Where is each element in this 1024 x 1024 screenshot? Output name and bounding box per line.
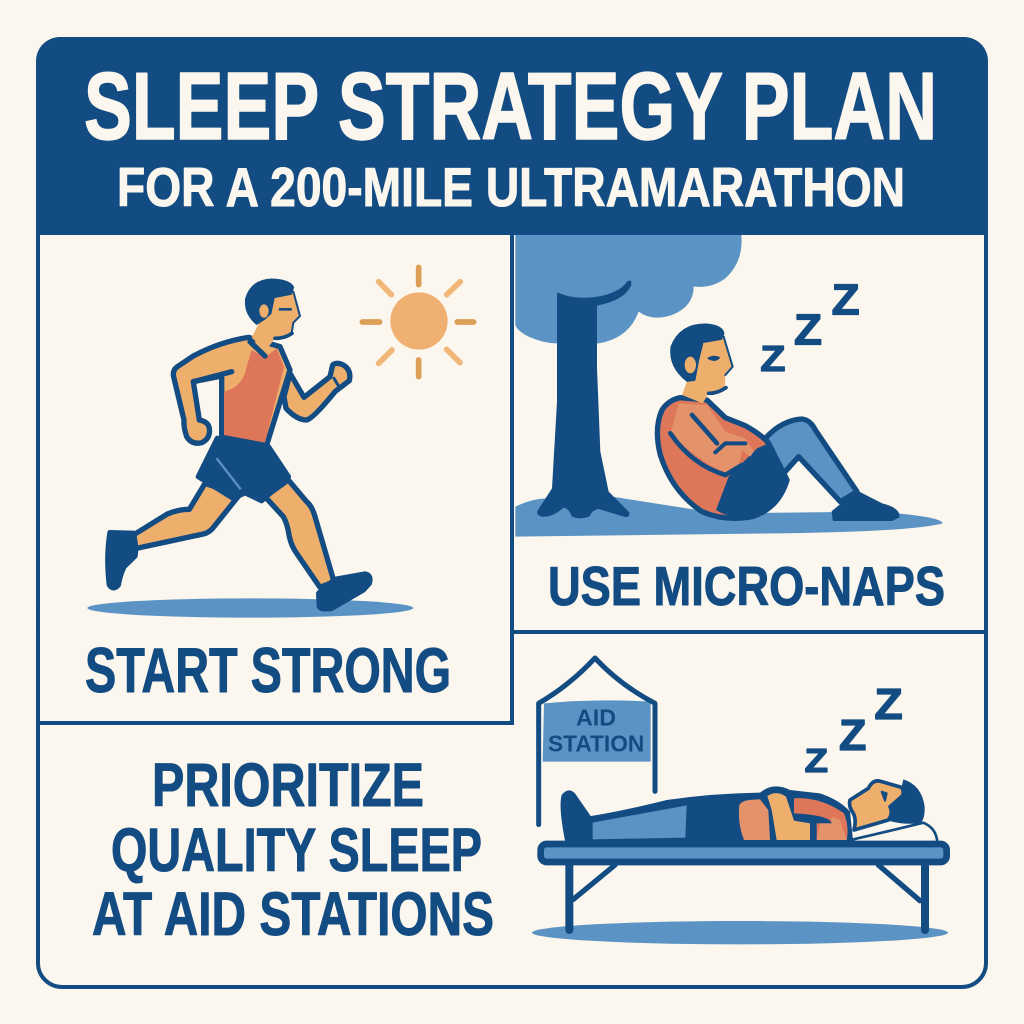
label: start strong: START STRONG bbox=[85, 636, 451, 706]
icon: sleeping zs: Z bbox=[805, 743, 828, 780]
panel: use micro-naps bbox=[515, 235, 945, 617]
panel: start strong bbox=[85, 267, 474, 706]
icon: sleeping zs bbox=[805, 681, 903, 780]
shorts bbox=[198, 438, 288, 501]
icon: sleeping zs: Z bbox=[760, 338, 785, 379]
leg bbox=[765, 419, 857, 502]
header banner bbox=[36, 37, 988, 235]
hair bbox=[671, 324, 724, 381]
neck and face bbox=[682, 337, 734, 403]
hair bbox=[888, 779, 925, 824]
body silhouette bbox=[561, 786, 853, 843]
icon: sleeping zs: Z bbox=[794, 306, 822, 354]
cot legs bbox=[569, 863, 925, 930]
torso bbox=[657, 398, 787, 518]
icon: sleeping zs: Z bbox=[874, 681, 903, 729]
icon: runner bbox=[87, 279, 413, 618]
front arm bbox=[284, 363, 350, 420]
neck and face bbox=[252, 292, 300, 352]
shirt: lower bbox=[739, 799, 770, 840]
label: prioritize quality sleep at aid stations: PRIORITIZE bbox=[152, 751, 424, 819]
arm bbox=[767, 793, 810, 840]
jeans bbox=[593, 805, 687, 839]
icon: aid station tent bbox=[539, 658, 655, 825]
back shoe bbox=[108, 533, 136, 588]
pillow bbox=[853, 823, 937, 843]
label: prioritize quality sleep at aid stations: QUALITY SLEEP bbox=[111, 816, 482, 884]
icon: sun bbox=[362, 267, 474, 377]
icon: aid station tent: STATION bbox=[548, 731, 644, 757]
singlet bbox=[224, 348, 284, 443]
shoe bbox=[833, 492, 899, 520]
tree crown bbox=[515, 235, 742, 343]
tree trunk bbox=[537, 281, 631, 518]
icon: sleeping zs: Z bbox=[832, 276, 860, 324]
back leg bbox=[133, 483, 239, 549]
shirt: upper bbox=[794, 798, 848, 840]
icon: sleeping zs bbox=[760, 276, 860, 379]
label: prioritize quality sleep at aid stations bbox=[92, 751, 494, 948]
label: prioritize quality sleep at aid stations: AT AID STATIONS bbox=[92, 880, 494, 948]
front shoe bbox=[319, 574, 370, 609]
icon: seated runner napping bbox=[657, 324, 899, 520]
cot top bbox=[541, 844, 947, 862]
ground shadow bbox=[87, 598, 413, 618]
panel dividers bbox=[38, 235, 986, 724]
folded arm bbox=[671, 403, 754, 472]
head bbox=[850, 781, 903, 830]
cot shadow bbox=[532, 921, 948, 944]
icon: aid station tent: AID bbox=[576, 704, 616, 730]
torso and rear arm bbox=[173, 337, 290, 445]
icon: sleeping zs: Z bbox=[839, 712, 866, 760]
ground bbox=[515, 497, 943, 537]
label: use micro-naps: USE MICRO-NAPS bbox=[548, 555, 945, 617]
hips bbox=[716, 443, 787, 517]
front leg bbox=[265, 480, 334, 587]
hair bbox=[246, 279, 293, 324]
shorts stripe bbox=[217, 458, 241, 489]
icon: runner lying on cot bbox=[532, 779, 948, 944]
panel: prioritize quality sleep bbox=[92, 658, 948, 948]
